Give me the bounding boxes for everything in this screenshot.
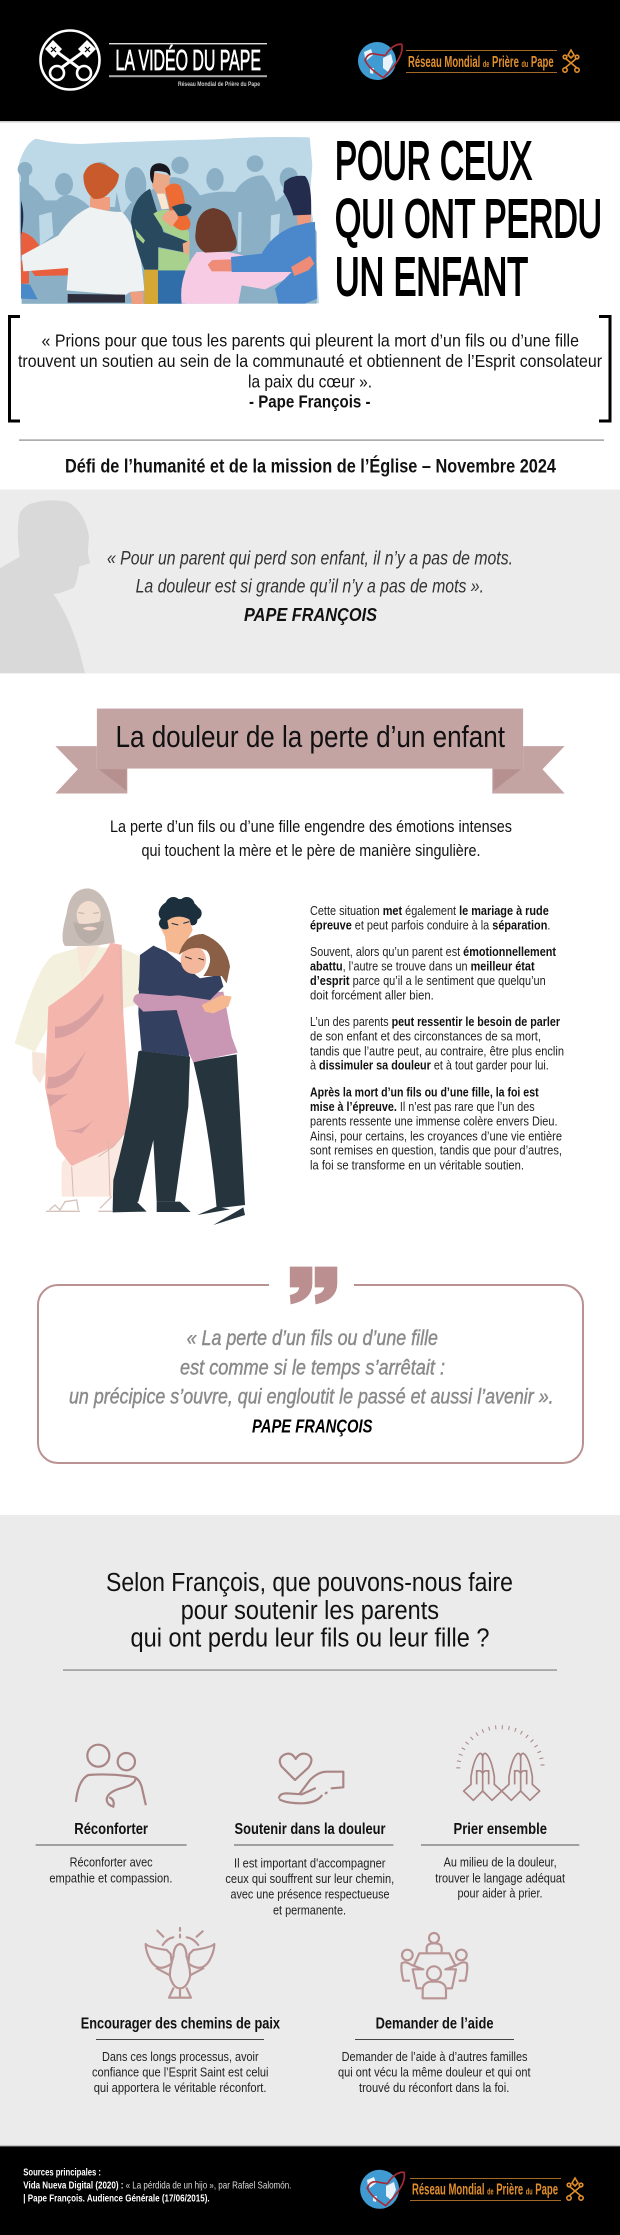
explanatory text column: parents ressente une immense colère envers Dieu. [310, 1113, 558, 1128]
explanatory text column: à dissimuler sa douleur et à tout garder pour lui. [310, 1058, 549, 1073]
prayer intention quote in brackets: - Pape François - [249, 391, 371, 411]
card: Soutenir dans la douleur: ceux qui souffrent sur leur chemin, [225, 1872, 394, 1886]
silhouette of Pope Francis [0, 500, 90, 673]
section ribbon heading [55, 709, 565, 794]
logo: Réseau Mondial de Prière du Pape [360, 2170, 583, 2209]
card: Soutenir dans la douleur: et permanente. [273, 1903, 346, 1917]
card: Encourager des chemins de paix: confiance que l’Esprit Saint est celui [92, 2066, 268, 2080]
explanatory text column: L’un des parents peut ressentir le besoin de parler [310, 1014, 560, 1029]
logo: La Vidéo du Pape [40, 30, 267, 90]
card: Soutenir dans la douleur: avec une présence respectueuse [230, 1888, 390, 1902]
logo: Réseau Mondial de Prière du Pape [358, 42, 579, 80]
sources: Vida Nueva Digital (2020) : « La pérdida de un hijo », par Rafael Salomón. [23, 2180, 291, 2192]
panel: Pope silhouette quote: « Pour un parent qui perd son enfant, il n’y a pas de mots. [107, 547, 513, 569]
explanatory text column: Ainsi, pour certains, les croyances d’une vie entière [310, 1128, 562, 1143]
logo: La Vidéo du Pape: Réseau Mondial de Prière du Pape [178, 81, 260, 88]
prayer intention quote in brackets [10, 316, 610, 421]
illustration: community embracing grieving parents [18, 137, 319, 304]
card: Prier ensemble: Prier ensemble [454, 1821, 547, 1838]
card: Demander de l'aide [338, 1933, 531, 2095]
callout: quote box: est comme si le temps s’arrêtait : [180, 1355, 445, 1379]
panel: Pope silhouette quote: PAPE FRANÇOIS [244, 604, 378, 625]
card: Demander de l'aide: trouvé du réconfort dans la foi. [359, 2081, 509, 2095]
left figure [21, 231, 41, 284]
explanatory text column: doit forcément aller bien. [310, 988, 434, 1003]
card: Soutenir dans la douleur [225, 1754, 394, 1917]
card: Soutenir dans la douleur: Soutenir dans la douleur [234, 1821, 386, 1838]
couple [113, 897, 245, 1225]
icon: praying hands [458, 1727, 543, 1800]
panel: how to support parents [0, 1515, 620, 2146]
card: Demander de l'aide: qui ont vécu la même douleur et qui ont [338, 2066, 531, 2080]
explanatory text column: sont remises en question, tandis que pour d’autres, [310, 1143, 562, 1158]
card: Réconforter: Réconforter [74, 1821, 148, 1838]
explanatory text column: d’esprit parce qu’il a le sentiment que quelqu’un [310, 973, 546, 988]
Jesus figure [15, 888, 142, 1211]
woman in pink sweater [181, 208, 294, 304]
card: Encourager des chemins de paix: qui apportera le véritable réconfort. [94, 2081, 266, 2095]
header band [0, 0, 620, 122]
card: Prier ensemble: Au milieu de la douleur, [444, 1856, 557, 1870]
explanatory text column: Souvent, alors qu’un parent est émotionnellement [310, 944, 557, 959]
icon: quotation marks [290, 1267, 337, 1304]
sources [23, 2167, 291, 2205]
card: Réconforter [36, 1745, 187, 1885]
card: Prier ensemble: pour aider à prier. [458, 1887, 542, 1901]
card: Demander de l'aide: Demander de l’aide [376, 2015, 494, 2032]
explanatory text column: de son enfant et des circonstances de sa mort, [310, 1029, 541, 1044]
intro text: La perte d’un fils ou d’une fille engendre des émotions intenses [110, 817, 512, 836]
section heading: qui ont perdu leur fils ou leur fille ? [130, 1625, 490, 1653]
logo: Réseau Mondial de Prière du Pape: Réseau Mondial de Prière du Pape [408, 54, 554, 71]
card: Encourager des chemins de paix [81, 1928, 280, 2095]
card: Encourager des chemins de paix: Encourager des chemins de paix [81, 2015, 280, 2032]
section heading [106, 1569, 513, 1653]
section heading: pour soutenir les parents [181, 1597, 439, 1625]
callout: quote box: PAPE FRANÇOIS [252, 1416, 373, 1437]
intro text [110, 817, 512, 860]
panel: Pope silhouette quote: La douleur est si grande qu’il n’y a pas de mots ». [136, 576, 484, 598]
logo: La Vidéo du Pape: LA VIDÉO DU PAPE [116, 45, 261, 77]
card: Réconforter: Réconforter avec [70, 1856, 153, 1870]
main title [335, 131, 602, 307]
background blob [19, 137, 319, 304]
icon: embrace [76, 1745, 146, 1807]
prayer intention quote in brackets: la paix du cœur ». [248, 371, 372, 391]
explanatory text column: tandis que l’autre peut, au contraire, être plus enclin [310, 1043, 564, 1058]
explanatory text column: Après la mort d’un fils ou d’une fille, la foi est [310, 1084, 539, 1099]
card: Soutenir dans la douleur: Il est important d'accompagner [234, 1856, 386, 1870]
section ribbon heading: La douleur de la perte d’un enfant [116, 720, 505, 754]
callout: quote box: « La perte d’un fils ou d’une fille [187, 1326, 438, 1350]
explanatory text column: mise à l’épreuve. Il n’est pas rare que l’un des [310, 1099, 535, 1114]
sources: Sources principales : [23, 2167, 101, 2179]
footer band [0, 2146, 620, 2235]
man in white sweater [22, 163, 144, 304]
icon: dove [146, 1928, 214, 1998]
card: Encourager des chemins de paix: Dans ces longs processus, avoir [102, 2050, 259, 2064]
explanatory text column: abattu, l’autre se trouve dans un meilleur état [310, 959, 535, 974]
card: Prier ensemble: trouver le langage adéquat [435, 1871, 565, 1885]
icon: people around a table [401, 1933, 467, 1998]
card: Demander de l'aide: Demander de l’aide à d’autres familles [342, 2050, 528, 2064]
prayer intention quote in brackets: « Prions pour que tous les parents qui pleurent la mort d’un fils ou d’une fille [42, 331, 579, 351]
logo: Réseau Mondial de Prière du Pape: Réseau Mondial de Prière du Pape [412, 2181, 558, 2198]
intro text: qui touchent la mère et le père de manière singulière. [142, 841, 480, 860]
card: Réconforter: empathie et compassion. [49, 1871, 172, 1885]
man in blue shirt [231, 176, 317, 304]
explanatory text column [310, 903, 564, 1172]
explanatory text column: la foi se transforme en un véritable soutien. [310, 1157, 524, 1172]
card: Prier ensemble [421, 1727, 579, 1901]
panel: Pope silhouette quote [0, 490, 620, 674]
callout: quote box [38, 1267, 583, 1463]
explanatory text column: épreuve et peut parfois conduire à la séparation. [310, 918, 550, 933]
embracing couple [131, 163, 192, 304]
explanatory text column: Cette situation met également le mariage à rude [310, 903, 549, 918]
icon: heart in hand [279, 1754, 343, 1803]
crowd silhouettes [18, 155, 317, 304]
illustration: Jesus behind hugging couple [15, 888, 245, 1225]
sources: | Pape François. Audience Générale (17/06/2015). [23, 2193, 210, 2205]
section heading: Selon François, que pouvons-nous faire [106, 1569, 513, 1597]
